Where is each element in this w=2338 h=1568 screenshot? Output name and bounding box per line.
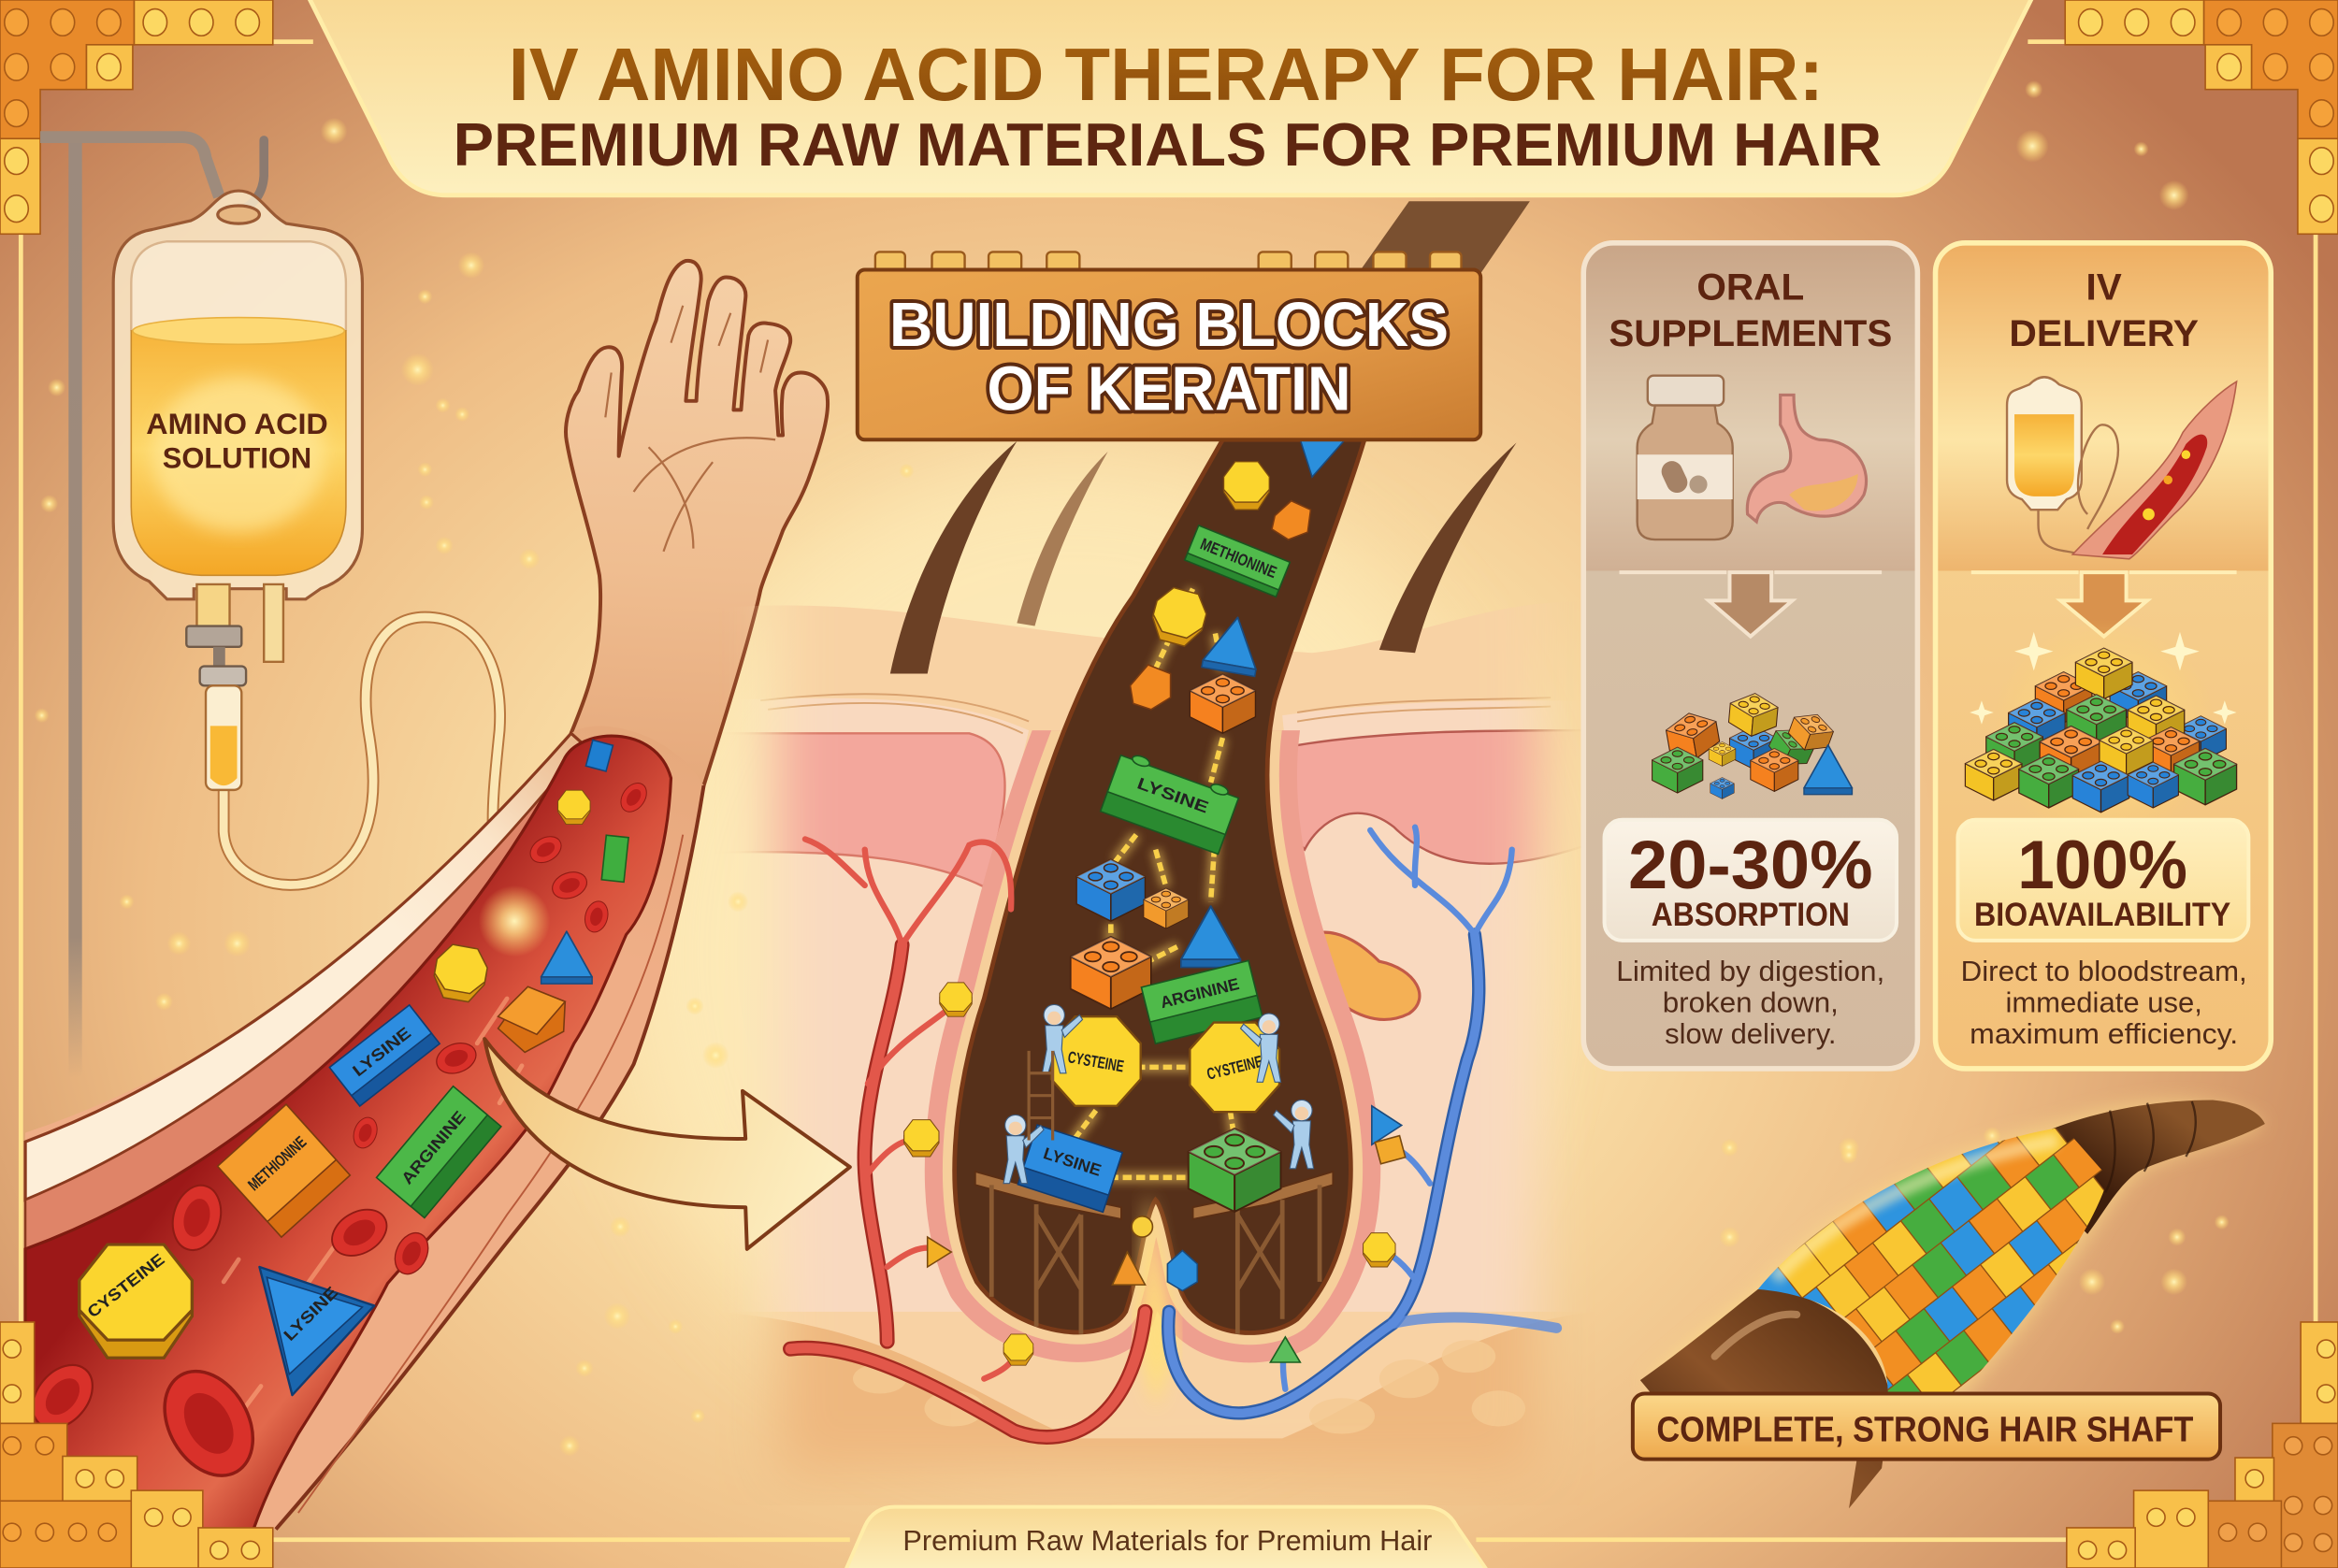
block: arginine: ARGININE [397, 1107, 469, 1187]
oral description [1616, 957, 1884, 1050]
bag label: AMINO ACID [146, 407, 328, 440]
title line 2: PREMIUM RAW MATERIALS FOR PREMIUM HAIR [454, 110, 1882, 179]
block: lysine triangle [259, 1267, 374, 1395]
heading: building blocks of keratin [858, 252, 1480, 439]
block: methionine: METHIONINE [1198, 534, 1279, 582]
hair follicle and shaft [955, 201, 1530, 1408]
complete hair shaft [1640, 1067, 2265, 1508]
iv description: maximum efficiency. [1970, 1019, 2238, 1050]
red artery [790, 839, 1145, 1437]
footer banner [844, 1507, 1490, 1568]
block: lysine scaffold: LYSINE [1041, 1144, 1104, 1180]
keratin blocks in shaft [1017, 439, 1345, 1212]
brick pyramid [1965, 619, 2237, 842]
block: cysteine right: CYSTEINE [1205, 1052, 1264, 1084]
iv heading [2009, 266, 2199, 354]
iv description [1961, 957, 2247, 1050]
block: cysteine left: CYSTEINE [1066, 1047, 1125, 1075]
shaft tip [2005, 1100, 2265, 1234]
panel: oral supplements [1583, 243, 1917, 1069]
blood cells [21, 778, 652, 1491]
block: cysteine: CYSTEINE [83, 1250, 168, 1321]
block: methionine [1185, 525, 1290, 597]
icon: supplement bottle [1638, 376, 1733, 539]
iv description: Direct to bloodstream, [1961, 957, 2247, 987]
iv stat box: BIOAVAILABILITY [1974, 897, 2230, 933]
oral description: Limited by digestion, [1616, 957, 1884, 987]
skin cross-section [715, 601, 1595, 1505]
panel: iv delivery [1936, 243, 2271, 1069]
curved arrow [484, 1039, 850, 1249]
block: arginine [1141, 960, 1263, 1043]
block: cysteine left [1051, 1016, 1141, 1106]
IV bag [113, 191, 362, 790]
iv stat box: 100% [2017, 827, 2187, 903]
brick band [1758, 1128, 2104, 1391]
sebaceous gland [1299, 932, 1420, 1019]
icon: small vessel [2072, 381, 2237, 559]
vessel lumen [25, 736, 671, 1530]
scaffolds [975, 1172, 1333, 1334]
icon: small iv bag [2007, 377, 2118, 554]
IV tubing [224, 617, 514, 921]
icon: stomach [1747, 395, 1867, 522]
iv heading: IV [2086, 266, 2122, 308]
sparkle stars [1970, 632, 2237, 725]
label: complete strong hair shaft: COMPLETE, STRONG HAIR SHAFT [1656, 1410, 2193, 1450]
scattered bricks [1652, 691, 1852, 798]
needle glow [479, 885, 550, 957]
heading: building blocks of keratin: BUILDING BLOCKS [889, 290, 1449, 360]
corner bricks: top left [0, 0, 273, 234]
bag label [146, 407, 328, 475]
hairs emerging from skin [890, 441, 1516, 674]
IV pole [40, 137, 264, 1078]
block: arginine [377, 1086, 501, 1217]
block: lysine: LYSINE [349, 1023, 414, 1080]
blocks along vessels [904, 983, 1406, 1365]
bag label: SOLUTION [163, 441, 311, 475]
block: cysteine right [1190, 1023, 1279, 1112]
oral description: slow delivery. [1665, 1019, 1836, 1050]
oral description: broken down, [1663, 987, 1839, 1018]
block: lysine triangle: LYSINE [280, 1283, 341, 1345]
block: arginine: ARGININE [1159, 974, 1241, 1012]
hand and wrist [566, 261, 828, 785]
corner bricks: top right [2065, 0, 2338, 234]
footer banner: Premium Raw Materials for Premium Hair [902, 1526, 1432, 1557]
oral heading [1609, 266, 1892, 354]
oral stat box [1605, 820, 1897, 941]
oral stat box: ABSORPTION [1652, 897, 1850, 933]
oral divider arrow [1620, 572, 1882, 637]
title banner [307, 0, 2034, 195]
block: cysteine [79, 1244, 192, 1358]
block: lysine scaffold [1017, 1125, 1122, 1212]
label: complete strong hair shaft [1633, 1393, 2220, 1460]
corner bricks: bottom left [0, 1322, 273, 1568]
gold chains [1074, 589, 1234, 1177]
block: methionine: METHIONINE [244, 1132, 310, 1194]
oral stat box: 20-30% [1628, 827, 1873, 903]
heading: building blocks of keratin: OF KERATIN [987, 353, 1351, 424]
shaft base [1640, 1289, 1891, 1508]
workers [1003, 1004, 1314, 1184]
vessel cross-section in forearm [21, 726, 704, 1530]
iv heading: DELIVERY [2009, 313, 2199, 354]
block: lysine [1101, 750, 1241, 854]
title line 1: IV AMINO ACID THERAPY FOR HAIR: [509, 33, 1824, 116]
block: lysine [329, 1005, 440, 1106]
oral heading: ORAL [1696, 266, 1804, 308]
block: methionine [218, 1104, 350, 1237]
corner bricks: bottom right [2067, 1322, 2338, 1568]
iv stat box [1957, 820, 2248, 941]
block: lysine: LYSINE [1134, 773, 1211, 817]
iv divider arrow [1971, 572, 2237, 637]
blue vein [1168, 827, 1557, 1413]
oral heading: SUPPLEMENTS [1609, 313, 1892, 354]
iv description: immediate use, [2005, 987, 2202, 1018]
floating blocks in blood [79, 740, 628, 1395]
